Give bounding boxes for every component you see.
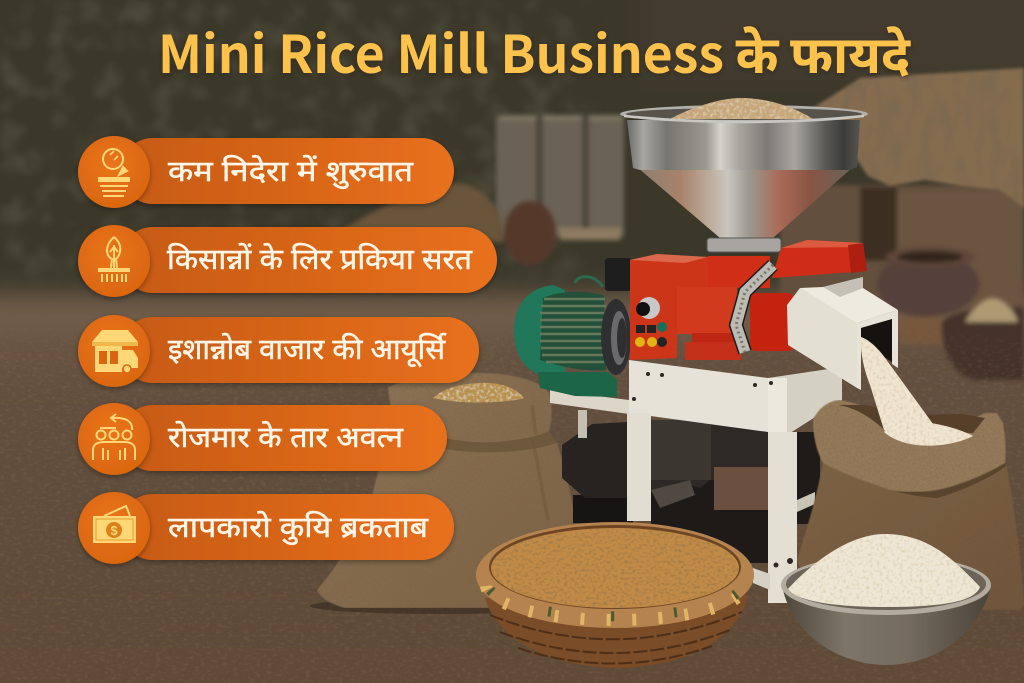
steel bowl with white rice: [781, 534, 991, 665]
rice mill machine: [514, 98, 898, 603]
background: straw heap: [345, 183, 505, 242]
machine: belt guard: [736, 265, 773, 352]
machine: red housings: [630, 240, 867, 360]
background: clay pots and basket: [504, 201, 1024, 380]
icon: coin and hand: [98, 149, 130, 196]
label: इशान्नोब वाजार की आयूर्सि: [168, 333, 447, 367]
label: कम निदेरा में शुरुवात: [168, 155, 414, 189]
pill background: [120, 494, 454, 560]
icon disc: [78, 492, 150, 564]
pill background: [120, 317, 479, 383]
machine: white frame: [550, 360, 842, 603]
background: thatched roof: [810, 68, 1024, 208]
machine: green motor: [514, 258, 631, 397]
rice stream: [861, 337, 933, 434]
machine: white outlet chute: [787, 277, 898, 390]
label: लापकारो कुयि ब्रकताब: [168, 511, 428, 545]
machine: rear gearbox and dark interior: [562, 420, 820, 563]
icon: banknote: $: [110, 523, 118, 538]
icon: plant: [98, 237, 130, 282]
pill background: [120, 405, 447, 471]
pill background: [120, 227, 497, 293]
title: Mini Rice Mill Business के फायदे: [158, 13, 911, 88]
benefit 2: pill: [78, 225, 497, 297]
benefit 5: pill: [78, 492, 454, 564]
label: रोजमार के तार अवत्न: [168, 421, 404, 454]
benefit 1: pill: [78, 136, 454, 208]
benefit 3: pill: [78, 315, 479, 387]
label: किसान्नों के लिर प्रकिया सरत: [167, 243, 472, 276]
icon disc: [78, 315, 150, 387]
icon disc: [78, 225, 150, 297]
pill background: [120, 138, 454, 204]
icon disc: [78, 403, 150, 475]
icon: banknote: [93, 506, 136, 543]
icon disc: [78, 136, 150, 208]
background: fence and wall: [496, 115, 1024, 310]
woven basket with paddy: [476, 522, 754, 668]
right sack with white rice: [797, 400, 1024, 610]
icon: people with arrow: [93, 414, 135, 460]
icon: shop and truck: [92, 330, 138, 373]
machine: controls: [635, 297, 667, 347]
machine: steel hopper: [620, 98, 868, 252]
benefit 4: pill: [78, 403, 447, 475]
left grain sack: [310, 373, 575, 614]
